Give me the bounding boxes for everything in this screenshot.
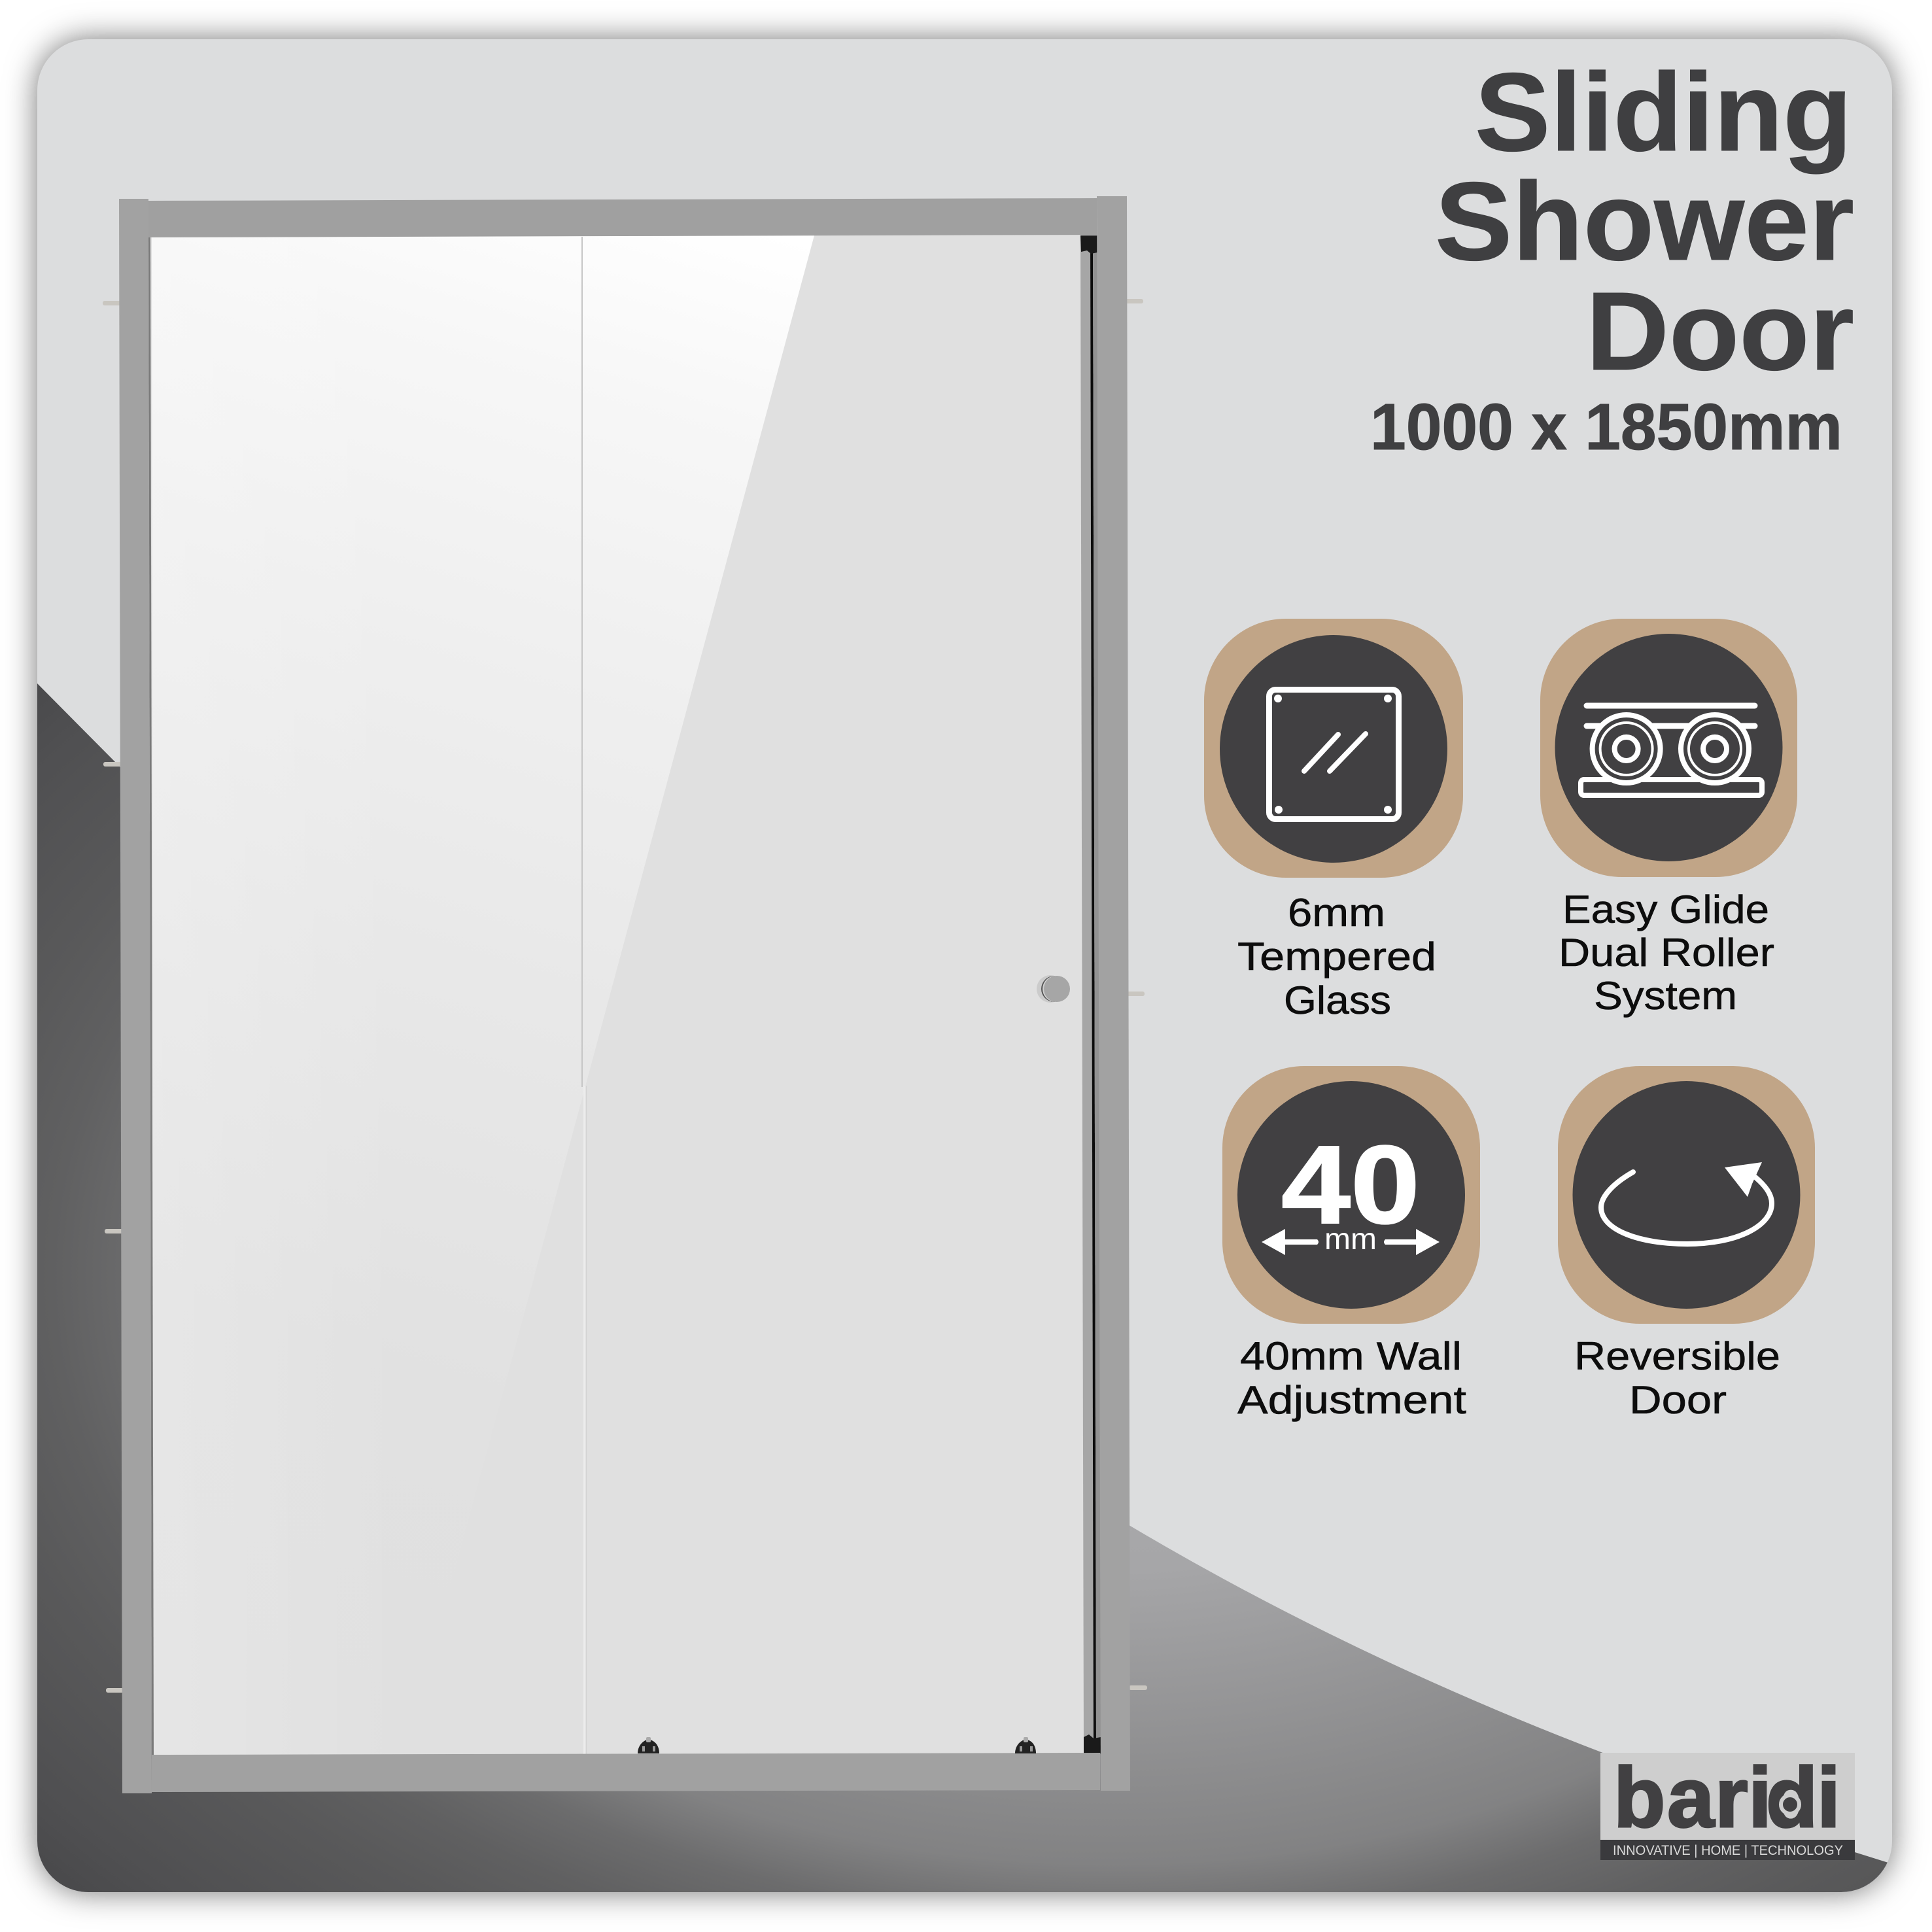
dark gradient background shape	[33, 680, 1897, 1897]
feature: dual roller	[1540, 619, 1797, 1018]
label: Easy Glide	[1562, 888, 1769, 931]
label: System	[1594, 974, 1737, 1018]
logo: baridi	[1600, 1750, 1855, 1860]
left glass edge line	[148, 237, 154, 1755]
label: Door	[1629, 1378, 1727, 1422]
glass panels	[148, 235, 1087, 1755]
label	[1237, 1334, 1466, 1422]
label: Adjustment	[1237, 1378, 1466, 1422]
tagline: INNOVATIVE | HOME | TECHNOLOGY	[1613, 1843, 1843, 1858]
title: Door	[1586, 269, 1854, 394]
frame: bottom rail	[152, 1753, 1100, 1792]
title	[1435, 50, 1854, 394]
shower door product illustration	[103, 196, 1147, 1793]
feature: tempered glass	[1204, 619, 1463, 1022]
icon circle	[1237, 1081, 1465, 1309]
bottom roller guide right	[1015, 1737, 1036, 1753]
label: Dual Roller	[1559, 931, 1774, 975]
wall bracket tabs	[103, 299, 1147, 1693]
icon: 40 mm arrows: 40	[1281, 1123, 1420, 1247]
title: Sliding	[1475, 50, 1852, 175]
label	[1574, 1334, 1780, 1422]
icon: rollers	[1581, 706, 1762, 795]
icon: glass pane	[1269, 689, 1398, 819]
icon: rotation arrow	[1601, 1162, 1772, 1244]
icon: 40 mm arrows: mm	[1324, 1222, 1377, 1256]
icon tile	[1222, 1066, 1480, 1324]
label	[1237, 891, 1436, 1022]
label: 6mm	[1288, 891, 1385, 935]
icon tile	[1558, 1066, 1815, 1324]
label	[1559, 888, 1774, 1018]
bottom roller guide left	[638, 1737, 659, 1753]
frame: top rail	[148, 198, 1097, 237]
icon circle	[1220, 635, 1447, 863]
icon tile	[1204, 619, 1463, 878]
frame: left post	[119, 199, 152, 1793]
logo ring accent	[1781, 1795, 1799, 1814]
icon: 40 mm arrows	[1262, 1123, 1440, 1256]
subtitle: dimensions: 1000 x 1850mm	[1370, 390, 1842, 464]
label: Tempered	[1237, 935, 1436, 978]
right door channel	[1080, 235, 1101, 1753]
glass reflection	[152, 235, 814, 1755]
frame: right post	[1097, 196, 1130, 1791]
label: Reversible	[1574, 1334, 1780, 1378]
label: Glass	[1284, 978, 1391, 1022]
feature: wall adjustment	[1222, 1066, 1480, 1422]
door handle knob	[1037, 975, 1070, 1003]
feature: reversible door	[1558, 1066, 1815, 1422]
icon circle	[1555, 634, 1783, 861]
icon circle	[1572, 1081, 1800, 1309]
icon tile	[1540, 619, 1797, 877]
title: Shower	[1435, 160, 1854, 284]
label: 40mm Wall	[1240, 1334, 1462, 1378]
glass panel seam	[581, 237, 587, 1754]
wordmark: baridi	[1613, 1750, 1840, 1845]
